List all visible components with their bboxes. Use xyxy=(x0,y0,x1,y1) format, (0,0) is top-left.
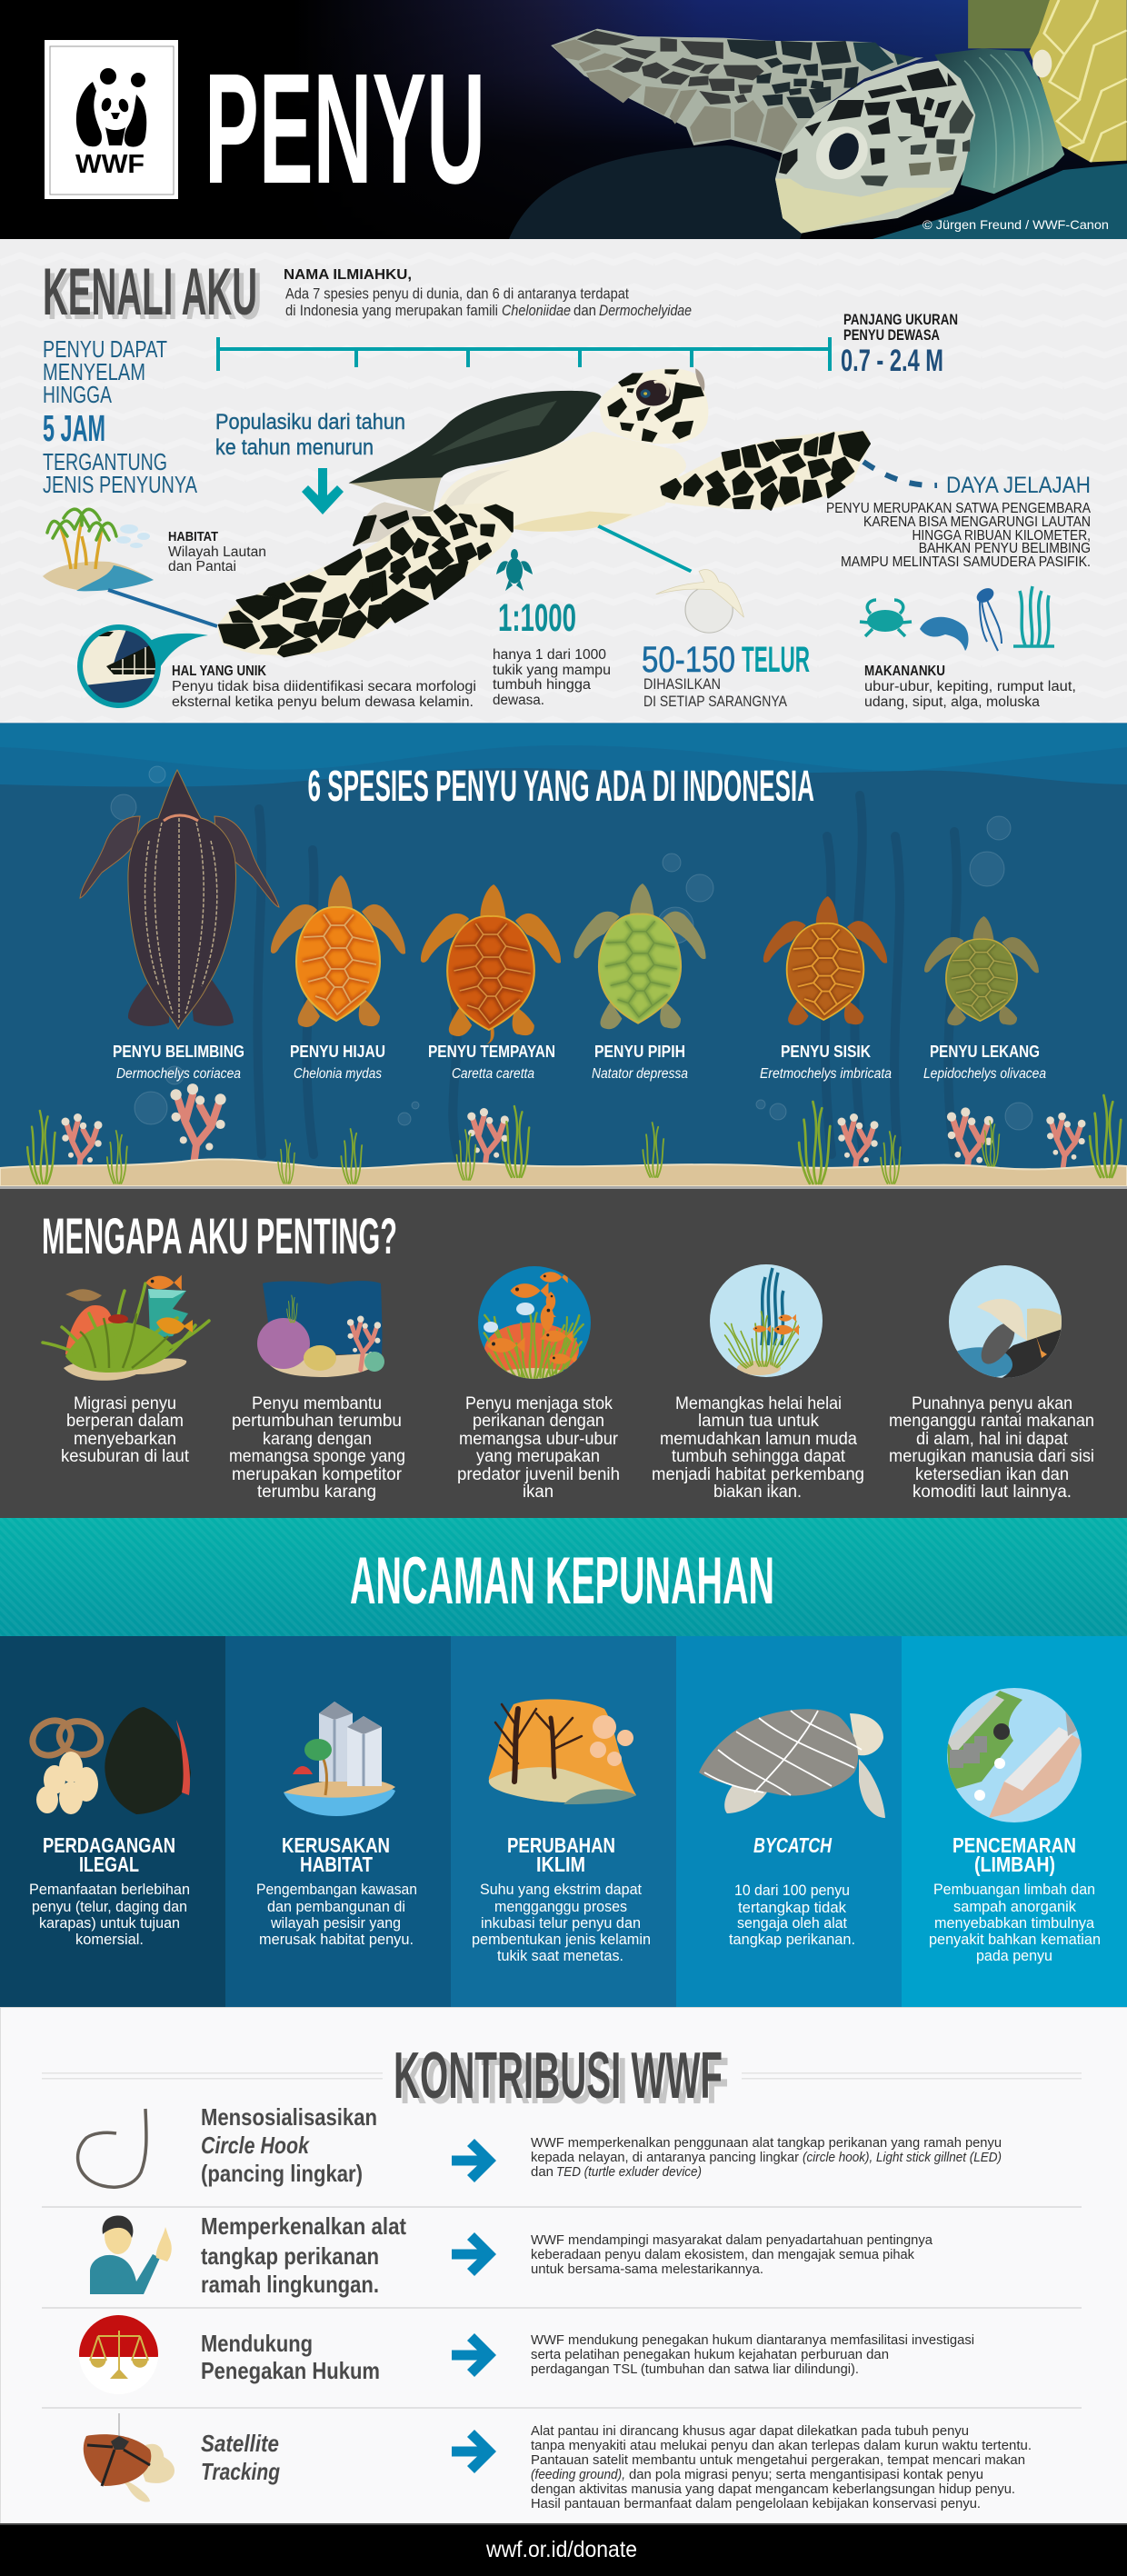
text: law enforcement detail: perdagangan TSL (tumbuhan dan satwa liar dilindungi). xyxy=(531,2361,859,2377)
heading: fishing gear: Memperkenalkan alat xyxy=(201,2212,406,2240)
text: daya jelajah detail: PENYU MERUPAKAN SATWA PENGEMBARA xyxy=(826,501,1092,516)
text: 1 in 1000 detail: tumbuh hingga xyxy=(493,677,591,693)
text: 1 in 1000 detail: hanya 1 dari 1000 xyxy=(493,647,606,663)
illustration: seagrass circle xyxy=(710,1263,823,1378)
illustration: dry trees xyxy=(489,1699,636,1804)
text: kerusakan habitat: HABITAT xyxy=(300,1852,373,1876)
text: why important columns: Penyu menjaga stok xyxy=(465,1394,613,1413)
text: perubahan iklim: Suhu yang ekstrim dapat xyxy=(480,1882,642,1898)
text: circle hook detail: TED (turtle exluder device) xyxy=(556,2164,702,2180)
species labels: Natator depressa xyxy=(592,1066,688,1082)
heading: satellite tracking: Tracking xyxy=(201,2458,280,2485)
text: bycatch: sengaja oleh alat xyxy=(737,1915,847,1932)
icon: jellyfish xyxy=(974,585,1002,651)
text: perubahan iklim: tukik saat menetas. xyxy=(497,1948,623,1964)
text: pencemaran: PENCEMARAN xyxy=(952,1833,1076,1857)
title: PENYU xyxy=(204,40,485,216)
text: nama ilmiah: Ada 7 spesies penyu di dunia, dan 6 di antaranya terdapat xyxy=(285,285,629,302)
icon: panda xyxy=(76,68,146,147)
text: bycatch: tertangkap tidak xyxy=(738,1900,847,1916)
text: satellite tracking detail: tanpa menyakiti atau melukai penyu dan akan terlepas dalam kurun waktu tertentu. xyxy=(531,2438,1032,2453)
heading: mengapa aku penting: MENGAPA AKU PENTING? xyxy=(42,1207,397,1264)
text: kerusakan habitat xyxy=(256,1833,417,1948)
turtle: belimbing xyxy=(80,770,279,1029)
turtle: hijau xyxy=(271,875,405,1027)
text: why important columns xyxy=(61,1394,1094,1502)
icon: egg and hatchling xyxy=(656,569,743,633)
heading: kenali aku: KENALI AKU xyxy=(47,260,262,334)
arrow xyxy=(452,2430,496,2473)
text: why important columns: merugikan manusia dari sisi xyxy=(889,1447,1094,1466)
text: satellite tracking detail: Hasil pantauan bermanfaat dalam pengelolaan kebijakan konservasi penyu. xyxy=(531,2496,981,2511)
front flipper large xyxy=(217,504,514,655)
illustration: main turtle xyxy=(217,368,870,656)
text: 1 in 1000 detail: dewasa. xyxy=(493,693,544,708)
panel: header photo banner xyxy=(0,0,1127,239)
turtle: tempayan xyxy=(421,884,561,1044)
row: circle hook xyxy=(78,2103,1002,2187)
text: why important columns: berperan dalam xyxy=(66,1412,184,1431)
text: law enforcement detail: WWF mendukung penegakan hukum diantaranya memfasilitasi investigasi xyxy=(531,2332,974,2348)
text: nama ilmiah xyxy=(284,267,692,319)
text: hal yang unik xyxy=(172,664,476,710)
rear flipper xyxy=(354,502,434,545)
panel: species in indonesia xyxy=(0,723,1127,1186)
text: perdagangan ilegal: penyu (telur, daging dan xyxy=(32,1899,187,1915)
text: population: Populasiku dari tahun xyxy=(215,410,405,434)
text: perubahan iklim: pembentukan jenis kelamin xyxy=(472,1932,651,1948)
text: daya jelajah detail xyxy=(826,501,1092,570)
text: habitat: Wilayah Lautan xyxy=(168,544,266,560)
heading: circle hook: (pancing lingkar) xyxy=(201,2160,363,2187)
text: why important columns: pertumbuhan terumbu xyxy=(232,1412,402,1431)
species labels: PENYU PIPIH xyxy=(594,1043,685,1061)
panel: kontribusi wwf xyxy=(0,2007,1127,2523)
text: dive depth: HINGGA xyxy=(43,381,112,408)
row: satellite tracking xyxy=(84,2413,1032,2511)
WWF logo xyxy=(45,40,178,199)
text: hal yang unik: HAL YANG UNIK xyxy=(172,664,267,679)
text: pencemaran: (LIMBAH) xyxy=(974,1852,1055,1876)
species labels: PENYU TEMPAYAN xyxy=(428,1043,555,1061)
text: pencemaran xyxy=(929,1833,1101,1964)
text: bycatch: 10 dari 100 penyu xyxy=(734,1882,850,1899)
heading: fishing gear: tangkap perikanan xyxy=(201,2242,379,2270)
turtle: lekang xyxy=(924,916,1039,1025)
footer xyxy=(0,2523,1127,2576)
text: why important columns: di alam, hal ini dapat xyxy=(916,1430,1069,1449)
arrow xyxy=(452,2232,496,2276)
panel: ancaman kepunahan header xyxy=(0,1518,1127,1636)
heading: circle hook: Mensosialisasikan xyxy=(201,2103,377,2131)
text: perdagangan ilegal: karapas) untuk tujuan xyxy=(39,1915,180,1932)
text: nama ilmiah: Cheloniidae xyxy=(502,303,571,319)
photo credit: © Jürgen Freund / WWF-Canon xyxy=(923,217,1109,232)
connector line: habitat xyxy=(108,590,217,626)
text: habitat: dan Pantai xyxy=(168,559,236,574)
icon: unique detail circle xyxy=(77,624,208,708)
text: pencemaran: penyakit bahkan kematian xyxy=(929,1932,1101,1948)
text: adult size: 0.7 - 2.4 M xyxy=(841,344,943,378)
shell top xyxy=(349,391,602,484)
text: 1 in 1000 detail: tukik yang mampu xyxy=(493,663,611,678)
text: perubahan iklim xyxy=(472,1833,651,1964)
text: makananku: udang, siput, alga, moluska xyxy=(864,694,1040,710)
heading: law enforcement: Penegakan Hukum xyxy=(201,2357,380,2384)
text: fishing gear detail: untuk bersama-sama melestarikannya. xyxy=(531,2261,763,2277)
heading: kontribusi wwf: KONTRIBUSI WWF xyxy=(400,2045,729,2118)
heading: circle hook xyxy=(201,2103,377,2187)
stat: eggs: TELUR xyxy=(742,640,810,680)
text: why important columns: tumbuh sehingga dapat xyxy=(672,1447,846,1466)
heading: kenali aku: KENALI AKU xyxy=(43,255,257,329)
row: fishing gear xyxy=(90,2212,933,2298)
text: fishing gear detail: WWF mendampingi masyarakat dalam penyadartahuan pentingnya xyxy=(531,2232,933,2248)
text: satellite tracking detail: Alat pantau ini dirancang khusus agar dapat dilekatkan pada tubuh penyu xyxy=(531,2423,969,2439)
turtle: pipih xyxy=(573,884,706,1029)
heading: satellite tracking xyxy=(201,2430,280,2485)
species labels: Lepidochelys olivacea xyxy=(923,1066,1046,1082)
text: nama ilmiah: NAMA ILMIAHKU, xyxy=(284,267,412,283)
text: nama ilmiah: Dermochelyidae xyxy=(599,303,692,319)
text: why important columns: perikanan dengan xyxy=(473,1412,604,1431)
text: why important columns: Penyu membantu xyxy=(252,1394,382,1413)
species labels: PENYU HIJAU xyxy=(290,1043,385,1061)
species labels: PENYU LEKANG xyxy=(930,1043,1040,1061)
illustration: buildings on island xyxy=(284,1702,395,1816)
icon: crab xyxy=(860,600,912,636)
text: law enforcement detail xyxy=(531,2332,974,2377)
text: dive depth: TERGANTUNG xyxy=(43,448,167,475)
illustration: pollution circle xyxy=(947,1687,1082,1823)
text: perdagangan ilegal: ILEGAL xyxy=(79,1852,139,1876)
turtle body xyxy=(436,432,686,532)
text: why important columns: memangsa ubur-ubur xyxy=(459,1430,619,1449)
illustration: seagrass reef xyxy=(43,1275,209,1381)
text: pencemaran: Pembuangan limbah dan xyxy=(933,1882,1095,1898)
stat: eggs xyxy=(642,640,810,710)
text: satellite tracking detail: dengan aktivitas manusia yang dapat mengancam keberlangsungan hidup penyu. xyxy=(531,2481,1015,2497)
text: perdagangan ilegal: PERDAGANGAN xyxy=(43,1833,175,1857)
text: why important columns: merupakan kompetitor xyxy=(232,1465,403,1484)
logo wordmark: WWF xyxy=(75,150,145,179)
icon: man pointing xyxy=(90,2216,172,2294)
icon: island habitat xyxy=(43,509,154,591)
text: why important columns: memangsa sponge yang xyxy=(229,1447,405,1466)
arrow xyxy=(452,2333,496,2377)
text: hal yang unik: Penyu tidak bisa diidentifikasi secara morfologi xyxy=(172,679,476,694)
text: 1 in 1000 detail xyxy=(493,647,611,708)
text: kerusakan habitat: wilayah pesisir yang xyxy=(270,1915,401,1932)
text: satellite tracking detail: Pantauan satelit membantu untuk mengetahui pergerakan, tempat mencari makan xyxy=(531,2452,1025,2468)
text: fishing gear detail: keberadaan penyu dalam ekosistem, dan mengajak semua pihak xyxy=(531,2247,914,2262)
illustration: netted turtle xyxy=(699,1709,885,1818)
shell underside xyxy=(349,472,444,513)
text: why important columns: yang merupakan xyxy=(476,1447,600,1466)
corals xyxy=(62,1083,1085,1182)
connector line: hatchling xyxy=(598,526,691,571)
heading: fishing gear: ramah lingkungan. xyxy=(201,2271,379,2298)
turtle: sisik xyxy=(763,896,887,1025)
text: nama ilmiah: di Indonesia yang merupakan famili xyxy=(285,303,498,319)
stat: eggs: DI SETIAP SARANGNYA xyxy=(643,693,788,710)
heading: law enforcement xyxy=(201,2330,380,2384)
text: daya jelajah detail: HINGGA RIBUAN KILOMETER, xyxy=(913,528,1091,544)
illustration: shell, rings, eggs xyxy=(26,1707,191,1814)
text: bycatch xyxy=(729,1833,855,1948)
photo: turtle shell xyxy=(968,0,1127,162)
text: why important columns: biakan ikan. xyxy=(713,1483,802,1502)
background weeds xyxy=(257,795,957,1159)
text: perubahan iklim: inkubasi telur penyu dan xyxy=(481,1915,641,1932)
heading: circle hook: Circle Hook xyxy=(201,2132,310,2159)
icon: shrimp xyxy=(920,617,969,651)
text: why important columns: lamun tua untuk xyxy=(698,1412,819,1431)
stat: 1 in 1000: 1:1000 xyxy=(498,596,576,640)
icon: small turtle xyxy=(496,549,533,591)
text: pencemaran: menyebabkan timbulnya xyxy=(934,1915,1095,1932)
text: why important columns: komoditi laut lainnya. xyxy=(913,1483,1072,1502)
heading: kenali aku xyxy=(43,255,262,334)
panel: threat kerusakan habitat xyxy=(225,1636,451,2007)
species labels: Dermochelys coriacea xyxy=(116,1066,241,1082)
text: satellite tracking detail: dan pola migrasi penyu; serta mengantisipasi kontak penyu xyxy=(629,2467,983,2482)
heading: law enforcement: Mendukung xyxy=(201,2330,313,2357)
text: hal yang unik: eksternal ketika penyu belum dewasa kelamin. xyxy=(172,694,474,710)
text: makananku: MAKANANKU xyxy=(864,664,945,679)
text: habitat: HABITAT xyxy=(168,529,218,544)
text: circle hook detail: (circle hook), Light stick gillnet (LED) xyxy=(803,2150,1002,2165)
text: daya jelajah detail: MAMPU MELINTASI SAMUDERA PASIFIK. xyxy=(841,554,1091,570)
icon: seaweed xyxy=(1013,586,1054,646)
illustration: coral reef block xyxy=(257,1281,384,1377)
text: why important columns: kesuburan di laut xyxy=(61,1447,190,1466)
panel: threat pencemaran xyxy=(902,1636,1127,2007)
stat: eggs: DIHASILKAN xyxy=(643,675,721,693)
panel: threat perubahan iklim xyxy=(451,1636,676,2007)
text: why important columns: menjadi habitat perkembang xyxy=(652,1465,864,1484)
illustration: reef with fish xyxy=(478,1266,591,1379)
photo: turtle head xyxy=(775,48,1064,234)
text: why important columns: karang dengan xyxy=(263,1430,372,1449)
arrow: down xyxy=(302,468,344,514)
panel: kenali aku xyxy=(0,239,1127,723)
species labels: Eretmochelys imbricata xyxy=(760,1066,892,1082)
text: adult size xyxy=(841,311,958,378)
text: why important columns: predator juvenil benih xyxy=(457,1465,620,1484)
text: why important columns: Memangkas helai helai xyxy=(675,1394,842,1413)
text: nama ilmiah: dan xyxy=(573,303,596,319)
dashed path: range xyxy=(863,462,937,485)
heading: satellite tracking: Satellite xyxy=(201,2430,279,2457)
heading: kontribusi wwf xyxy=(394,2040,729,2118)
text: dive depth: JENIS PENYUNYA xyxy=(43,471,198,498)
text: daya jelajah detail: KARENA BISA MENGARUNGI LAUTAN xyxy=(863,514,1091,530)
text: satellite tracking detail xyxy=(531,2423,1032,2511)
text: satellite tracking detail: (feeding ground), xyxy=(531,2467,625,2482)
text: circle hook detail: WWF memperkenalkan penggunaan alat tangkap perikanan yang ramah penyu xyxy=(531,2135,1002,2151)
icon: scales on flag xyxy=(79,2315,158,2379)
text: why important columns: menganggu rantai makanan xyxy=(889,1412,1094,1431)
icon: hook xyxy=(78,2109,146,2187)
species labels: PENYU BELIMBING xyxy=(113,1043,244,1061)
photo: turtle flipper xyxy=(551,29,923,153)
illustration: dying turtle on rock xyxy=(949,1264,1062,1379)
heading: fishing gear xyxy=(201,2212,406,2298)
text: bycatch: BYCATCH xyxy=(753,1833,832,1857)
species labels: PENYU SISIK xyxy=(781,1043,871,1061)
text: makananku xyxy=(864,664,1076,710)
footer link text: wwf.or.id/donate xyxy=(485,2537,637,2562)
bubbles xyxy=(111,766,1032,1130)
text: law enforcement detail: serta pelatihan penegakan hukum kejahatan perburuan dan xyxy=(531,2347,889,2362)
icon: turtle with tag xyxy=(84,2413,175,2502)
species labels xyxy=(113,1043,1046,1082)
text: habitat xyxy=(168,529,266,574)
text: dive depth: PENYU DAPAT xyxy=(43,335,167,363)
heading: daya jelajah: DAYA JELAJAH xyxy=(946,473,1091,498)
species labels: Chelonia mydas xyxy=(294,1066,382,1082)
text: fishing gear detail xyxy=(531,2232,933,2277)
text: kerusakan habitat: KERUSAKAN xyxy=(282,1833,390,1857)
text: dive depth: MENYELAM xyxy=(43,358,145,385)
text: why important columns: Punahnya penyu akan xyxy=(912,1394,1072,1413)
photo: sea floor xyxy=(873,164,1127,239)
text: dive depth: 5 JAM xyxy=(43,407,105,449)
text: perdagangan ilegal: komersial. xyxy=(75,1932,144,1948)
species labels: Caretta caretta xyxy=(452,1066,534,1082)
text: population xyxy=(215,410,405,460)
text: perubahan iklim: mengganggu proses xyxy=(494,1899,627,1915)
text: circle hook detail: kepada nelayan, di antaranya pancing lingkar xyxy=(531,2150,799,2165)
text: perubahan iklim: IKLIM xyxy=(536,1852,585,1876)
heading: kontribusi wwf: KONTRIBUSI WWF xyxy=(394,2040,723,2112)
text: bycatch: tangkap perikanan. xyxy=(729,1932,855,1948)
text: why important columns: ketersedian ikan dan xyxy=(915,1465,1069,1484)
length ruler xyxy=(216,337,832,371)
text: why important columns: menyebarkan xyxy=(74,1430,176,1449)
text: dive depth xyxy=(43,335,198,498)
seabed sand xyxy=(0,1159,1127,1186)
text: perdagangan ilegal: Pemanfaatan berlebihan xyxy=(29,1882,190,1898)
text: why important columns: Migrasi penyu xyxy=(74,1394,176,1413)
text: kerusakan habitat: Pengembangan kawasan xyxy=(256,1882,417,1898)
front flipper right xyxy=(661,430,869,510)
text: kerusakan habitat: dan pembangunan di xyxy=(267,1899,405,1915)
text: why important columns: ikan xyxy=(523,1483,554,1502)
text: circle hook detail: dan xyxy=(531,2164,554,2180)
heading: ancaman kepunahan: ANCAMAN KEPUNAHAN xyxy=(350,1544,774,1618)
text: circle hook detail xyxy=(531,2135,1002,2180)
text: pencemaran: sampah anorganik xyxy=(953,1899,1077,1915)
stat: eggs: 50-150 xyxy=(642,640,735,680)
text: daya jelajah detail: BAHKAN PENYU BELIMBING xyxy=(919,541,1091,556)
row: law enforcement xyxy=(79,2315,974,2383)
text: population: ke tahun menurun xyxy=(215,435,374,460)
text: kerusakan habitat: merusak habitat penyu. xyxy=(259,1932,414,1948)
panel: mengapa aku penting xyxy=(0,1186,1127,1518)
text: pencemaran: pada penyu xyxy=(976,1948,1052,1964)
head xyxy=(600,368,708,444)
text: perubahan iklim: PERUBAHAN xyxy=(507,1833,615,1857)
panel: threat bycatch xyxy=(676,1636,902,2007)
text: why important columns: memudahkan lamun muda xyxy=(660,1430,857,1449)
text: adult size: PANJANG UKURAN xyxy=(843,311,958,328)
text: makananku: ubur-ubur, kepiting, rumput laut, xyxy=(864,679,1076,694)
text: perdagangan ilegal xyxy=(29,1833,190,1948)
arrow xyxy=(452,2139,496,2182)
text: adult size: PENYU DEWASA xyxy=(843,326,940,344)
text: why important columns: terumbu karang xyxy=(257,1483,376,1502)
panel: threat perdagangan ilegal xyxy=(0,1636,225,2007)
seagrass xyxy=(27,1095,1121,1183)
